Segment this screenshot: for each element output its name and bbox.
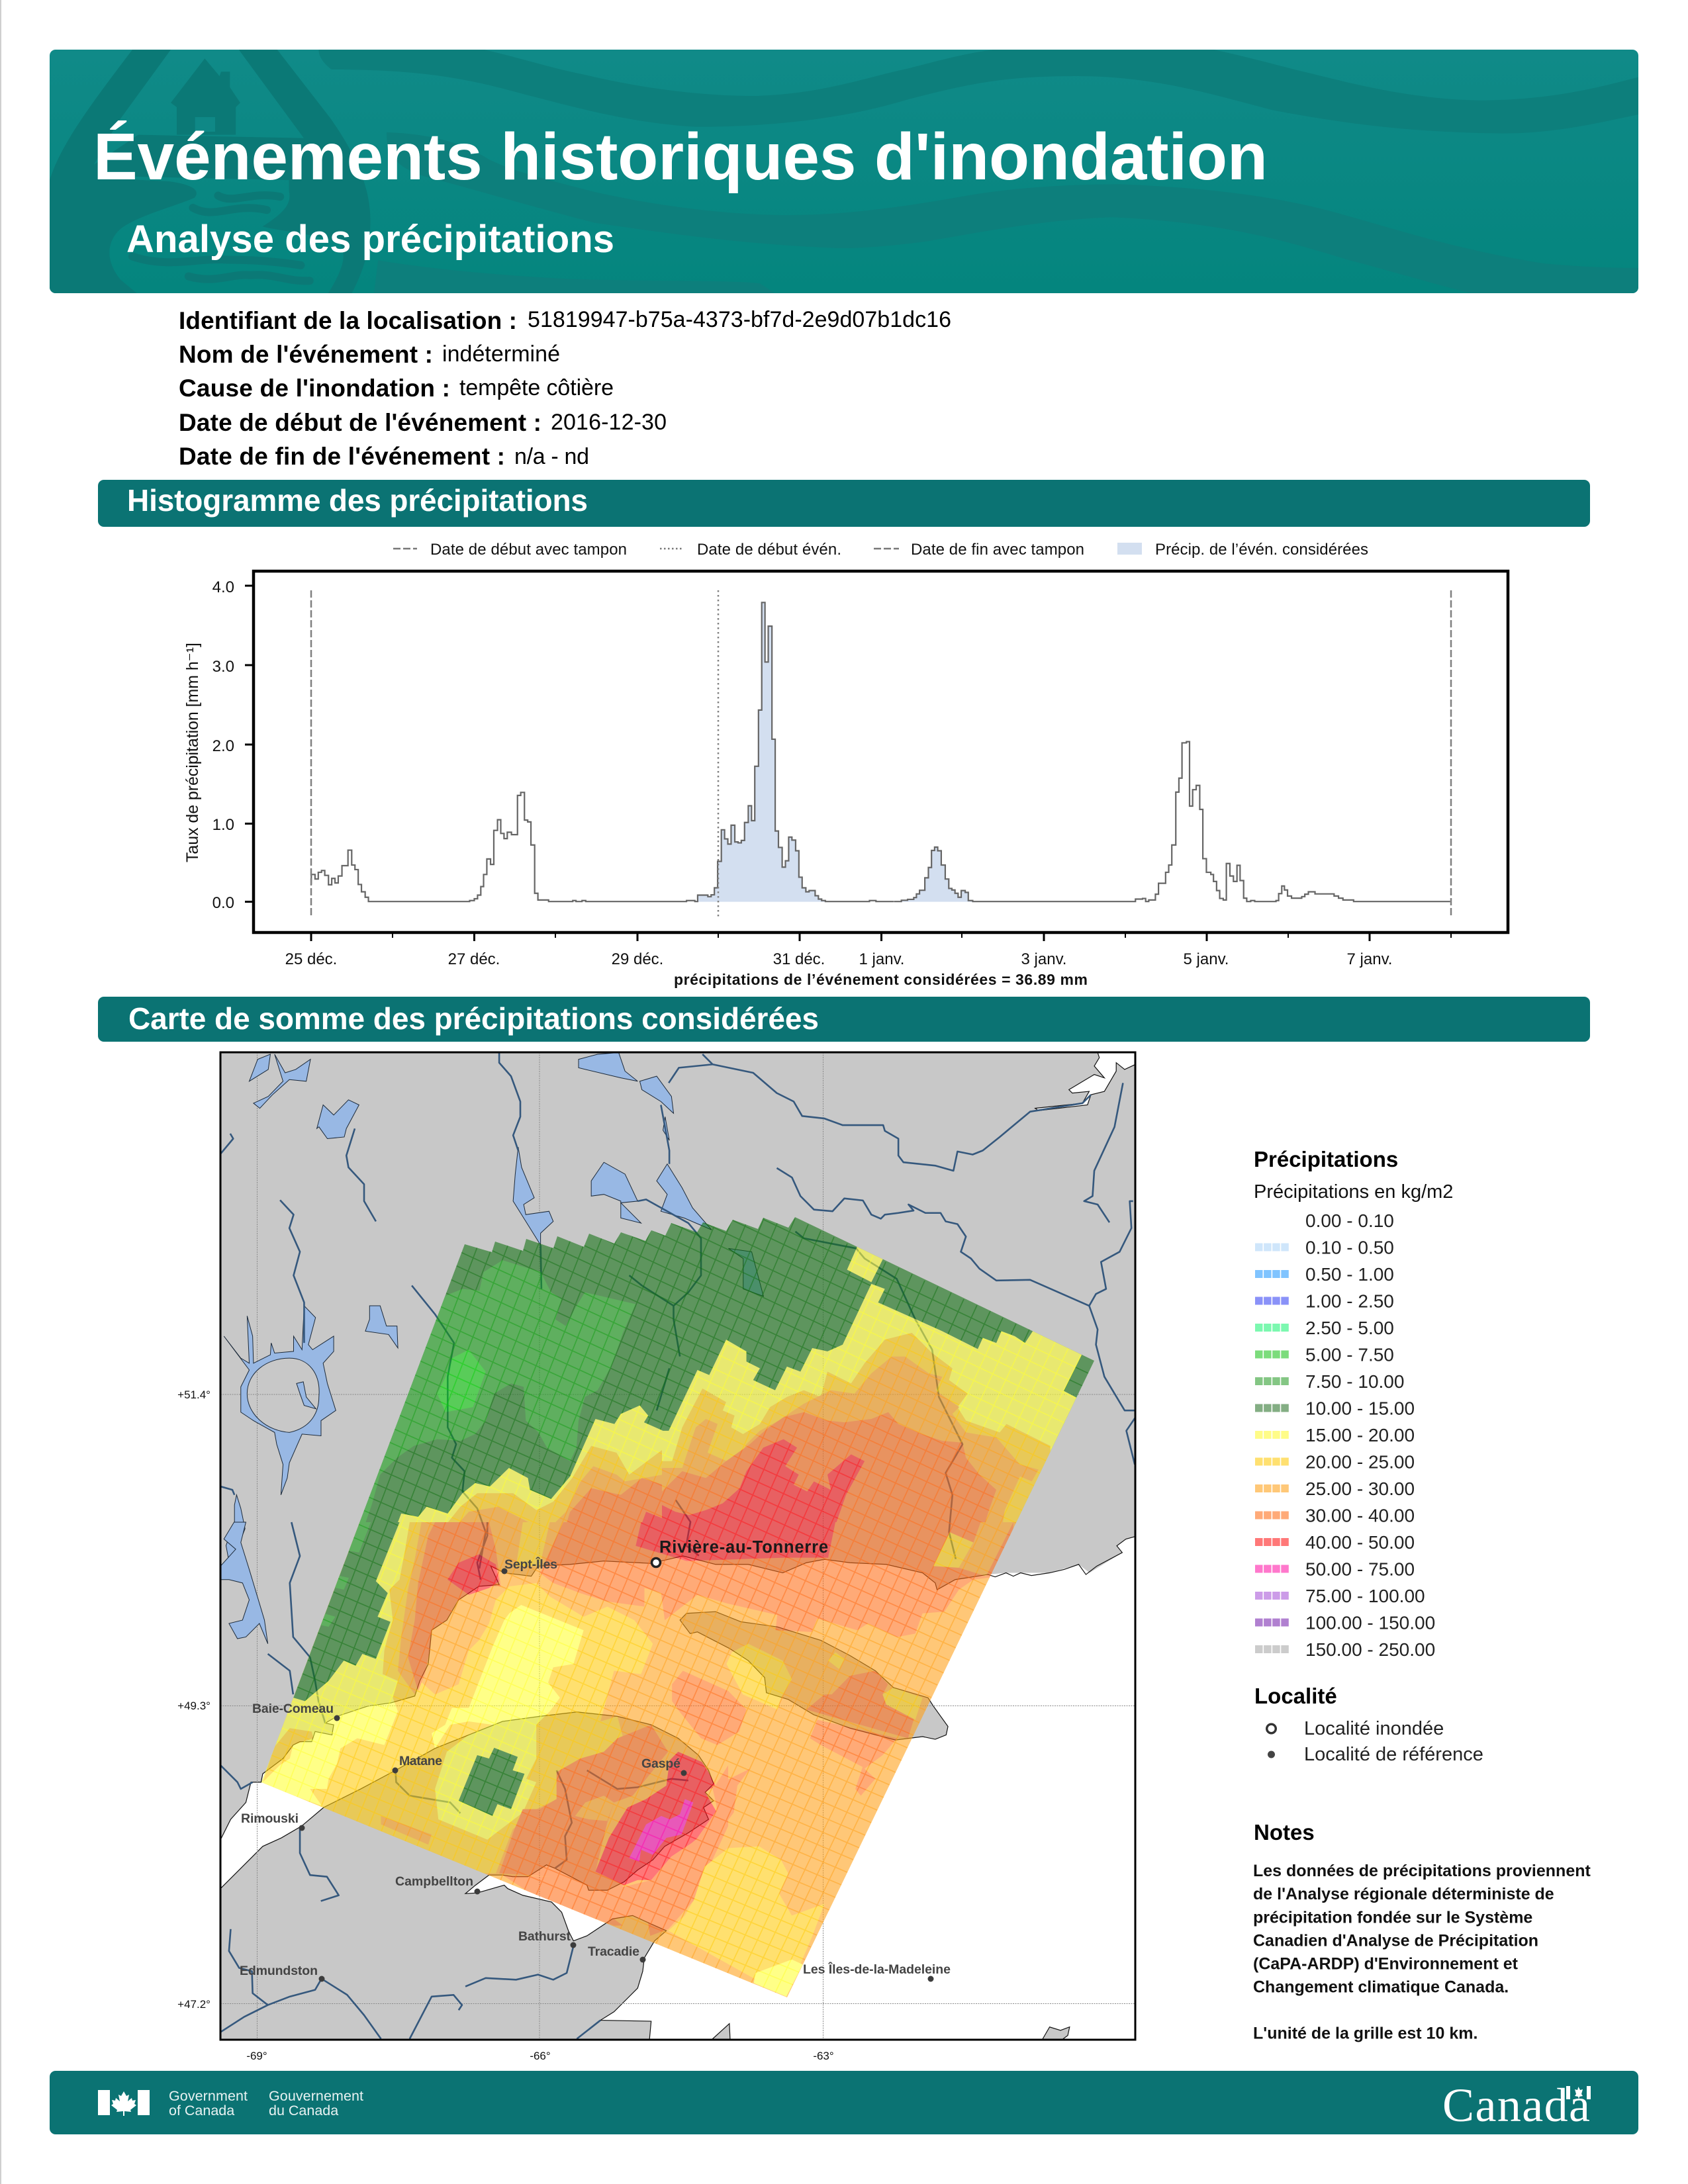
subtitle: Analyse des précipitations (126, 218, 614, 261)
government signature: Gouvernement (269, 2088, 363, 2104)
legend: precipitation classes (1254, 1147, 1453, 1660)
page edge line (0, 0, 1, 2184)
government signature: of Canada (169, 2103, 234, 2118)
chart legend: Date de fin avec tampon (911, 541, 1084, 559)
lakes (224, 1052, 763, 1569)
land: south shore, Anticosti and islands (220, 1612, 1070, 2040)
precipitation grid raster (261, 1217, 1094, 1997)
event information block: tempête côtière (459, 375, 614, 400)
event information block: Date de fin de l'événement : (179, 443, 505, 470)
precipitation step line (311, 602, 1450, 901)
legend: precipitation classes: 20.00 - 25.00 (1305, 1452, 1415, 1472)
city labels: Edmundston (240, 1964, 318, 1978)
legend: precipitation classes: Précipitations (1254, 1147, 1398, 1171)
graticule (220, 1052, 1135, 2040)
notes: Notes (1254, 1820, 1315, 1844)
shaded event precipitation (698, 602, 972, 902)
city labels: Campbellton (395, 1874, 473, 1889)
chart legend: Précip. de l’évén. considérées (1155, 541, 1368, 559)
legend: precipitation classes: 150.00 - 250.00 (1305, 1639, 1435, 1660)
city labels (240, 1556, 951, 1978)
legend: precipitation classes: 100.00 - 150.00 (1305, 1612, 1435, 1633)
map coordinate labels: -63° (813, 2050, 834, 2062)
x axis labels: 25 déc. (285, 950, 337, 968)
legend: precipitation classes: Précipitations en kg/m2 (1254, 1181, 1453, 1203)
city labels: Baie-Comeau (252, 1702, 334, 1716)
government signature (169, 2088, 363, 2118)
city labels: Gaspé (641, 1756, 680, 1771)
notes: précipitation fondée sur le Système (1253, 1909, 1532, 1927)
header banner (50, 50, 1642, 295)
event information block: 2016-12-30 (551, 410, 667, 435)
x axis labels: 29 déc. (612, 950, 663, 968)
y axis title: Taux de précipitation [mm h⁻¹] (183, 643, 202, 862)
section heading: histogram (98, 480, 1590, 527)
x axis labels: 1 janv. (859, 950, 904, 968)
plot area (254, 571, 1508, 933)
city labels: Bathurst (518, 1929, 571, 1944)
government signature: Government (169, 2088, 248, 2104)
notes: de l'Analyse régionale déterministe de (1253, 1885, 1554, 1903)
chart legend (393, 541, 1368, 559)
x axis labels (285, 950, 1392, 968)
legend: precipitation classes: 30.00 - 40.00 (1305, 1505, 1415, 1526)
y axis labels: 1.0 (212, 816, 234, 834)
notes: (CaPA-ARDP) d'Environnement et (1253, 1955, 1519, 1974)
event information block: indéterminé (442, 341, 560, 367)
legend: precipitation classes: 0.50 - 1.00 (1305, 1264, 1394, 1285)
legend: locality: Localité de référence (1304, 1744, 1483, 1765)
legend: precipitation classes: 1.00 - 2.50 (1305, 1291, 1394, 1312)
rivers (220, 1052, 701, 1569)
legend: precipitation classes: 50.00 - 75.00 (1305, 1559, 1415, 1579)
icon: flooded house logo watermark (50, 50, 371, 295)
notes: Changement climatique Canada. (1253, 1978, 1509, 1996)
Canada wordmark: Canada (1442, 2079, 1590, 2132)
map frame (220, 1052, 1135, 2040)
chart: precipitation rate histogram (183, 571, 1508, 988)
legend: precipitation classes: 40.00 - 50.00 (1305, 1532, 1415, 1553)
legend: precipitation classes: 0.00 - 0.10 (1305, 1210, 1394, 1231)
notes (1253, 1820, 1591, 2042)
chart legend: Date de début évén. (697, 541, 841, 559)
event information block: Identifiant de la localisation : (179, 307, 517, 334)
city labels: Les Îles-de-la-Madeleine (803, 1961, 951, 1977)
x axis labels: 31 déc. (773, 950, 825, 968)
legend: locality (1254, 1684, 1483, 1765)
title: Événements historiques d'inondation (93, 120, 1268, 194)
notes: Canadien d'Analyse de Précipitation (1253, 1931, 1538, 1950)
city labels: Rimouski (241, 1811, 299, 1826)
y axis labels: 2.0 (212, 737, 234, 755)
legend: precipitation classes: 25.00 - 30.00 (1305, 1479, 1415, 1499)
total precipitation caption: précipitations de l’événement considérées = 36.89 mm (674, 971, 1088, 988)
event information block: Nom de l'événement : (179, 341, 433, 368)
notes: Les données de précipitations proviennent (1253, 1862, 1591, 1880)
map panel (177, 1052, 1136, 2062)
event information block: n/a - nd (514, 444, 589, 469)
map coordinate labels: +49.3° (177, 1700, 211, 1712)
y axis labels: 3.0 (212, 658, 234, 676)
map coordinate labels: -66° (530, 2050, 551, 2062)
city labels: Tracadie (588, 1944, 639, 1959)
base map (220, 1052, 1136, 2042)
icon: Government of Canada flag (98, 2090, 150, 2116)
event information block: 51819947-b75a-4373-bf7d-2e9d07b1dc16 (528, 307, 951, 332)
legend: precipitation classes: 0.10 - 0.50 (1305, 1238, 1394, 1257)
footer bar (50, 2071, 1638, 2134)
map coordinate labels: -69° (246, 2050, 267, 2062)
x axis labels: 7 janv. (1347, 950, 1392, 968)
x axis labels: 3 janv. (1021, 950, 1066, 968)
y axis labels (212, 578, 234, 912)
flooded locality label: Rivière-au-Tonnerre (659, 1538, 828, 1557)
north shore coastline (220, 1536, 1136, 1840)
legend: locality: Localité (1254, 1684, 1337, 1708)
notes: L'unité de la grille est 10 km. (1253, 2024, 1477, 2042)
y axis labels: 0.0 (212, 894, 234, 912)
x axis labels: 5 janv. (1184, 950, 1229, 968)
legend: precipitation classes: 10.00 - 15.00 (1305, 1398, 1415, 1419)
map coordinate labels (177, 1388, 834, 2062)
decorative river waves (318, 50, 1642, 295)
city labels: Matane (399, 1754, 442, 1768)
legend: locality: Localité inondée (1304, 1718, 1444, 1739)
legend: precipitation classes: 15.00 - 20.00 (1305, 1425, 1415, 1445)
city labels: Sept-Îles (504, 1556, 557, 1572)
event date markers (311, 590, 1451, 917)
map coordinate labels: +51.4° (177, 1388, 211, 1401)
section heading: map: Carte de somme des précipitations considérées (128, 1001, 819, 1036)
reference cities (299, 1569, 933, 1981)
legend: precipitation classes: 75.00 - 100.00 (1305, 1586, 1425, 1606)
section heading: map (98, 997, 1590, 1042)
x axis labels: 27 déc. (448, 950, 500, 968)
map coordinate labels: +47.2° (177, 1998, 211, 2011)
government signature: du Canada (269, 2103, 338, 2118)
legend: precipitation classes: 5.00 - 7.50 (1305, 1345, 1394, 1365)
section heading: histogram: Histogramme des précipitations (127, 483, 588, 518)
y axis labels: 4.0 (212, 578, 234, 596)
water: estuary and gulf (220, 1052, 1136, 2042)
plot frame and ticks (245, 571, 1508, 941)
event information block: Cause de l'inondation : (179, 375, 450, 402)
flooded locality marker (651, 1558, 661, 1567)
event information block (179, 307, 951, 470)
chart legend: Date de début avec tampon (430, 541, 627, 559)
legend: precipitation classes: 2.50 - 5.00 (1305, 1318, 1394, 1338)
legend: precipitation classes: 7.50 - 10.00 (1305, 1371, 1404, 1392)
event information block: Date de début de l'événement : (179, 409, 541, 436)
